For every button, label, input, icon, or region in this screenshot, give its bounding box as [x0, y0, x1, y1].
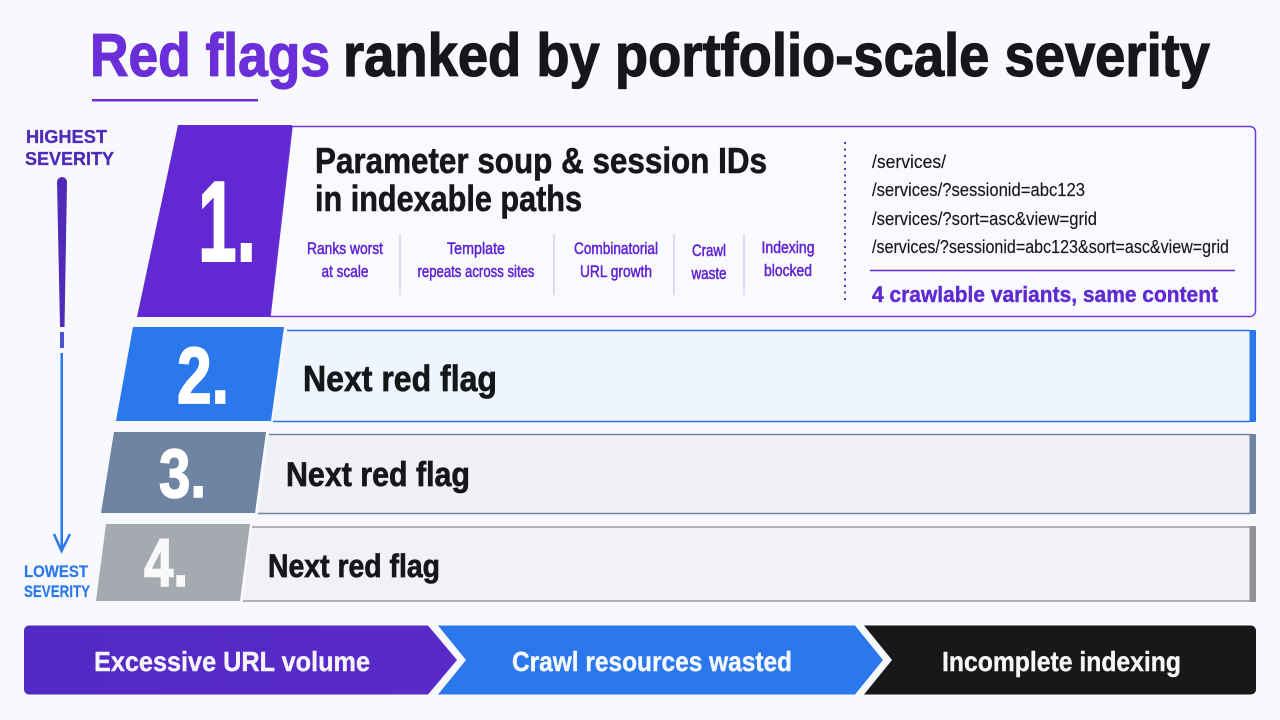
step: incomplete indexing: [864, 626, 1256, 694]
attribute: indexing blocked: blocked: [764, 262, 812, 280]
rank 3 card: [258, 434, 1256, 514]
attribute: crawl waste: Crawl: [692, 242, 726, 260]
URL variants list: /services/?sessionid=abc123&sort=asc&view=grid: [872, 237, 1229, 257]
URL variants summary: 4 crawlable variants, same content: [872, 282, 1219, 307]
title: Red flags: [90, 22, 330, 89]
URL variants list: /services/?sort=asc&view=grid: [872, 209, 1097, 229]
URL variants list: /services/?sessionid=abc123: [872, 180, 1085, 200]
title: ranked by portfolio-scale severity: [343, 22, 1211, 89]
label: lowest severity: LOWEST: [24, 563, 88, 581]
attribute: ranks worst at scale: Ranks worst: [307, 240, 383, 258]
URL variants list: [872, 152, 1229, 257]
rank 4 badge: [96, 524, 250, 601]
step: excessive URL volume: Excessive URL volume: [94, 646, 370, 677]
attribute: combinatorial URL growth: URL growth: [580, 263, 652, 281]
rank 1 attributes: [307, 239, 814, 283]
label: highest severity: HIGHEST: [26, 127, 107, 147]
rank 1 heading: Parameter soup & session IDs: [315, 140, 767, 181]
attribute: crawl waste: [691, 242, 726, 283]
arrow: severity descending: [54, 177, 70, 551]
rank 1 badge: [137, 125, 292, 317]
step: crawl resources wasted: [438, 626, 883, 694]
step: crawl resources wasted: Crawl resources wasted: [512, 646, 792, 677]
URL variants list: /services/: [872, 152, 946, 172]
title underline: [92, 99, 258, 102]
process flow: [24, 626, 1256, 694]
rank 3 label: Next red flag: [286, 456, 470, 494]
attribute: template repeats across sites: [418, 240, 534, 281]
step: excessive URL volume: [24, 626, 457, 694]
rank 4 badge: 4.: [144, 525, 188, 601]
rank 2 badge: [116, 327, 284, 421]
rank 3 badge: 3.: [159, 435, 206, 512]
rank 2 label: Next red flag: [303, 358, 497, 399]
attribute: indexing blocked: [762, 239, 814, 280]
attribute: ranks worst at scale: [307, 240, 383, 281]
panel: rank 4: [96, 524, 1256, 602]
attribute: template repeats across sites: repeats across sites: [418, 263, 534, 281]
label: lowest severity: [24, 563, 90, 601]
label: lowest severity: SEVERITY: [24, 583, 90, 601]
attribute: combinatorial URL growth: [574, 240, 658, 281]
rank 2 card: [273, 330, 1256, 422]
panel: rank 3: [101, 432, 1256, 514]
rank 1 heading: [315, 140, 767, 219]
attribute: template repeats across sites: Template: [447, 240, 505, 258]
rank 4 label: Next red flag: [268, 548, 440, 584]
attribute: indexing blocked: Indexing: [762, 239, 814, 257]
panel: rank 1: [137, 125, 1256, 317]
attribute: combinatorial URL growth: Combinatorial: [574, 240, 658, 258]
rank 4 card: [243, 526, 1256, 602]
attribute: ranks worst at scale: at scale: [322, 263, 368, 281]
rank 3 badge: [101, 432, 266, 513]
label: highest severity: [25, 127, 114, 169]
rank 1 badge: 1.: [198, 159, 256, 286]
rank 1 card: [270, 126, 1256, 316]
attribute: crawl waste: waste: [691, 265, 726, 283]
label: highest severity: SEVERITY: [25, 149, 114, 169]
panel: rank 2: [116, 327, 1256, 422]
rank 1 heading: in indexable paths: [315, 178, 582, 219]
rank 2 badge: 2.: [177, 331, 229, 420]
severity axis: [24, 127, 114, 601]
step: incomplete indexing: Incomplete indexing: [942, 646, 1181, 677]
